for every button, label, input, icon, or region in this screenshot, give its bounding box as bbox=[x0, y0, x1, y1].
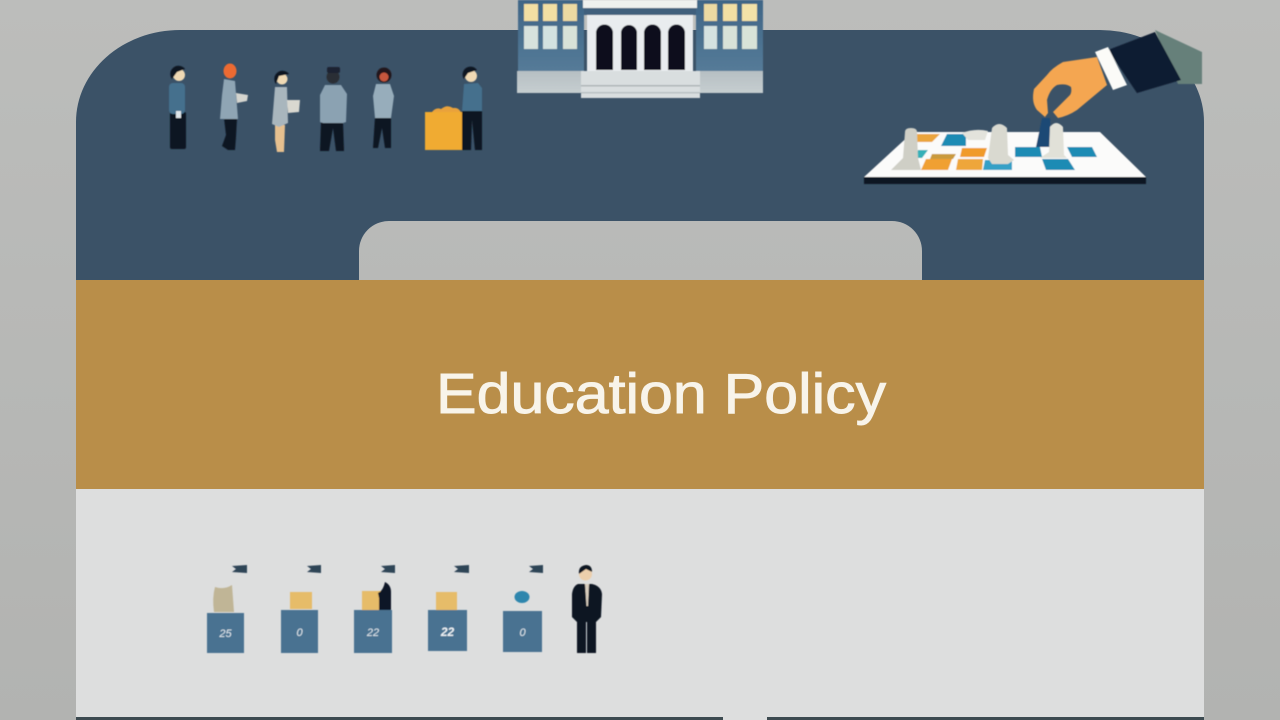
person 3 bbox=[272, 71, 300, 152]
hand moving chess piece on board bbox=[864, 30, 1202, 184]
steps bbox=[581, 71, 700, 98]
plinth bbox=[517, 71, 763, 93]
person 4 bbox=[320, 67, 347, 151]
person 2 bbox=[220, 64, 248, 150]
game board bbox=[864, 132, 1146, 184]
ballot box 3 bbox=[354, 565, 395, 653]
ballot box 3: 22 bbox=[366, 627, 379, 639]
ballot box 5: 0 bbox=[519, 627, 526, 639]
government building bbox=[517, 0, 763, 98]
arched doors bbox=[596, 25, 685, 70]
right wing bbox=[696, 0, 763, 71]
sleeve back panel bbox=[1155, 30, 1202, 84]
portico bbox=[583, 0, 697, 71]
ballot box 2: 0 bbox=[296, 627, 303, 639]
man in black suit bbox=[572, 565, 602, 653]
windows bbox=[524, 4, 757, 49]
person 1 bbox=[169, 66, 186, 149]
shirt cuff bbox=[1095, 47, 1127, 90]
panel: gold title band bbox=[76, 280, 1204, 489]
ballot box 1: 25 bbox=[218, 628, 232, 640]
hand bbox=[1033, 57, 1107, 118]
chess pieces bbox=[891, 118, 1067, 170]
ballot box 5 bbox=[503, 565, 543, 652]
jacket sleeve bbox=[1108, 32, 1181, 93]
footer bar left bbox=[76, 717, 723, 720]
row of ballot boxes bbox=[207, 565, 602, 653]
footer bar right bbox=[767, 717, 1204, 720]
row of people queuing bbox=[169, 64, 482, 152]
ballot box 4 bbox=[428, 565, 469, 651]
person with orange ballot box bbox=[425, 67, 482, 150]
ballot box 2 bbox=[281, 565, 321, 653]
panel: light lower section bbox=[76, 489, 1204, 720]
left wing bbox=[518, 0, 584, 71]
ballot box 4: 22 bbox=[440, 625, 454, 639]
ballot box 1 bbox=[207, 565, 247, 653]
panel: dark blue header bbox=[76, 0, 1204, 280]
title: Education Policy bbox=[436, 362, 887, 426]
person 5 bbox=[373, 68, 394, 148]
